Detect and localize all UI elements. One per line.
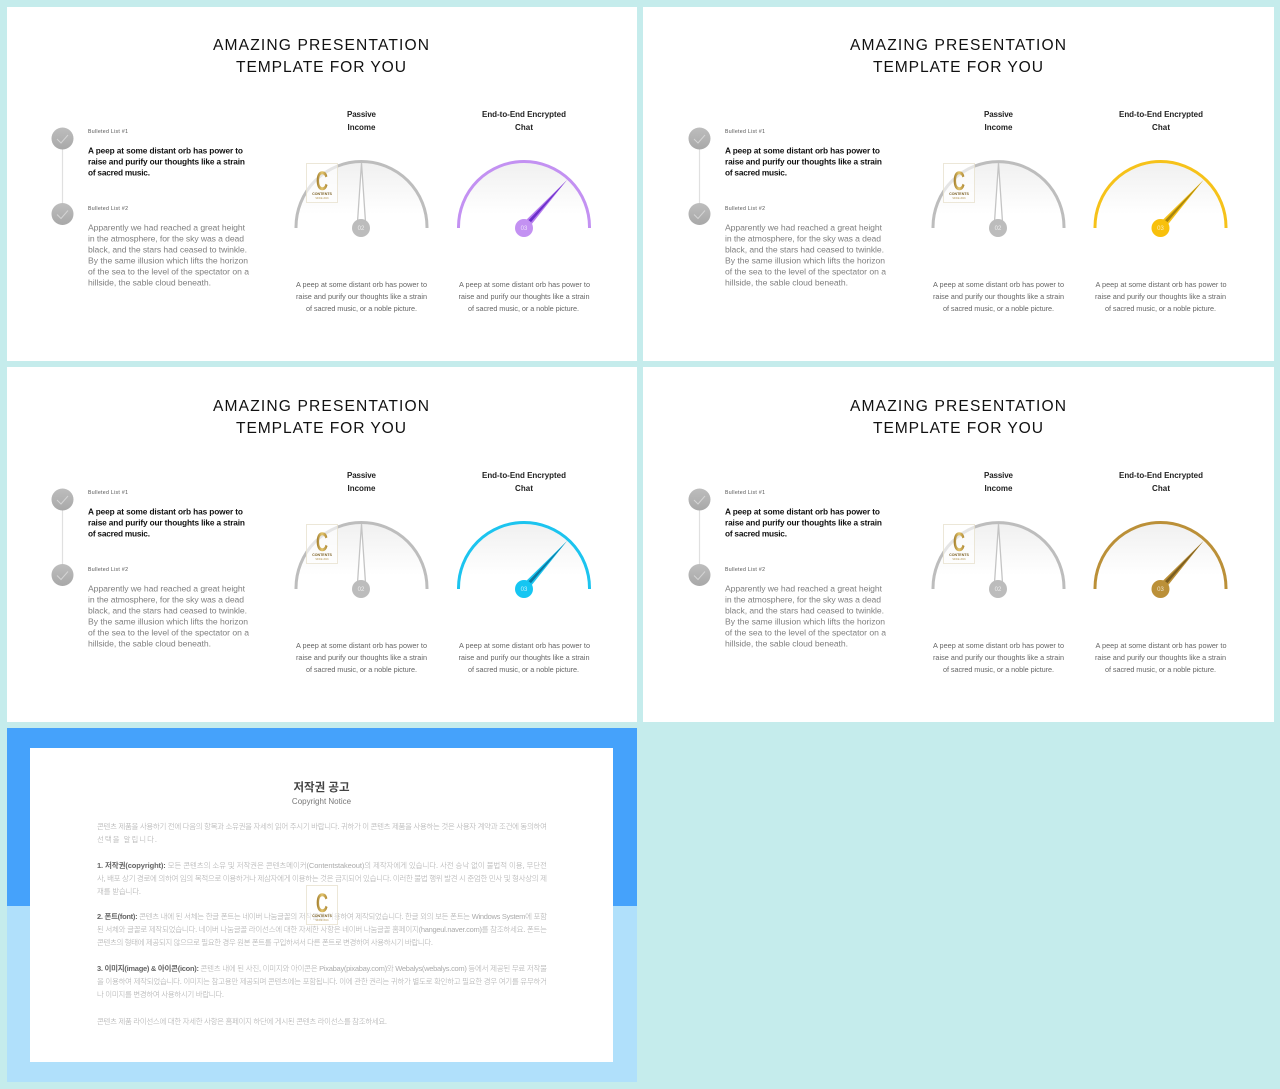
gauge: gold (1095, 522, 1226, 598)
section 3 images: 을 이용하여 제작되었습니다. 이미지는 참고용만 제공되며 콘텐츠에는 포함됩니다. 이에 관한 권리는 귀하가 별도로 확인하고 필요한 경우 여기를 유무하거 (97, 976, 547, 986)
watermark logo: CONTENTS (949, 192, 969, 196)
watermark logo: SINCE 2016 (952, 197, 966, 200)
heading: encrypted chat (482, 110, 566, 132)
bullet 2 text: By the same illusion which lifts the horizon (88, 256, 248, 266)
section 2 font: 콘텐츠의 형태에 제공되지 않으므로 필요한 경우 원본 폰트를 구입하셔서 다른 폰트로 변경하여 사용하시기 바랍니다. (97, 937, 433, 947)
bullet 2 text: Bulleted List #2 (725, 206, 765, 212)
heading: encrypted chat: Chat (1152, 123, 1170, 132)
caption left: raise and purify our thoughts like a strain (296, 653, 427, 662)
bullet 2 text: hillside, the sable cloud beneath. (725, 638, 848, 648)
title: TEMPLATE FOR YOU (236, 420, 406, 437)
watermark logo: CONTENTS (312, 553, 332, 557)
panel: copyright notice (7, 728, 637, 1082)
section 1 copyright: 재를 받습니다. (97, 887, 141, 896)
caption left: of sacred music, or a noble picture. (306, 665, 417, 674)
copyright heading: 저작권 공고 (293, 780, 350, 794)
section 1 copyright: 1. 저작권(copyright): 모든 콘텐츠의 소유 및 저작권은 콘텐츠메이커(Contentstakeout)의 제작자에게 있습니다. 사전 승낙 없이 불법적 이용, 무단전 (97, 860, 547, 870)
heading: passive income: Passive (984, 110, 1014, 119)
heading: encrypted chat: Chat (515, 123, 533, 132)
bullet 2 text: of the sea to the level of the spectator on a (88, 628, 249, 638)
caption left: A peep at some distant orb has power to (296, 641, 427, 650)
gauge: cyan (458, 522, 590, 598)
title: TEMPLATE FOR YOU (236, 59, 406, 76)
heading: encrypted chat: End-to-End Encrypted (482, 471, 566, 480)
bulleted list timeline (688, 128, 710, 225)
bullet 1 text (725, 490, 882, 538)
gauge: grey: 02 (995, 226, 1002, 232)
caption right: raise and purify our thoughts like a strain (458, 653, 590, 662)
bullet 2 text: in the atmosphere, for the sky was a dead (725, 234, 881, 244)
watermark logo: CONTENTS (949, 553, 969, 557)
title: AMAZING PRESENTATION (213, 398, 429, 415)
caption right (1095, 641, 1226, 674)
section 2 font (97, 911, 547, 947)
bullet 1 text: of sacred music. (88, 168, 150, 178)
section 1 copyright: 사, 배포 상기 경로에 의하여 임의 목적으로 이용하거나 제삼자에게 이용하는 것은 금지되어 있습니다. 이러한 불법 행위 발견 시 준엄한 민사 및 형사상의 제 (97, 873, 547, 883)
panel: slide 2 yellow gauge (643, 7, 1274, 361)
bullet 1 text: A peep at some distant orb has power to (88, 146, 243, 156)
caption right: of sacred music, or a noble picture. (1105, 304, 1216, 313)
caption right: A peep at some distant orb has power to (459, 641, 590, 650)
watermark logo (306, 524, 338, 564)
caption left: raise and purify our thoughts like a strain (933, 653, 1064, 662)
bullet 2 text: Apparently we had reached a great height (88, 222, 246, 232)
bullet 2 text: in the atmosphere, for the sky was a dead (88, 594, 244, 604)
bullet 1 text: of sacred music. (88, 528, 150, 538)
gauge: cyan: 03 (521, 587, 528, 593)
caption left: of sacred music, or a noble picture. (306, 304, 417, 313)
caption left: of sacred music, or a noble picture. (943, 665, 1054, 674)
caption right: A peep at some distant orb has power to (459, 280, 590, 289)
heading: passive income: Income (984, 484, 1013, 493)
watermark logo (306, 886, 338, 924)
bullet 2 text: in the atmosphere, for the sky was a dead (88, 234, 244, 244)
bullet 1 text: Bulleted List #1 (88, 490, 128, 496)
bullet 2 text: black, and the stars had ceased to twinkle. (88, 244, 247, 254)
heading: encrypted chat: Chat (1152, 484, 1170, 493)
gauge: grey: 02 (358, 587, 365, 593)
bullet 2 text: hillside, the sable cloud beneath. (725, 278, 848, 288)
heading: passive income: Income (348, 123, 376, 132)
bulleted list timeline (688, 488, 710, 586)
watermark logo: CONTENTS (312, 192, 332, 196)
bullet 2 text: of the sea to the level of the spectator on a (88, 266, 249, 276)
heading: passive income: Passive (347, 110, 377, 119)
heading: passive income: Income (348, 484, 376, 493)
watermark logo: C (953, 527, 965, 557)
gauge: yellow: 03 (1157, 226, 1164, 232)
watermark logo (306, 164, 338, 202)
heading: passive income (984, 110, 1014, 132)
panel: slide 3 cyan gauge (7, 367, 637, 722)
watermark logo: SINCE 2016 (315, 919, 329, 922)
bullet 2 text: Bulleted List #2 (88, 567, 128, 573)
heading: passive income: Income (984, 123, 1013, 132)
title (213, 37, 429, 76)
caption left: raise and purify our thoughts like a strain (933, 292, 1064, 301)
title: AMAZING PRESENTATION (213, 37, 429, 54)
gauge: grey (933, 162, 1064, 237)
caption right: of sacred music, or a noble picture. (468, 665, 579, 674)
bullet 2 text: By the same illusion which lifts the horizon (725, 616, 885, 626)
closing line: 콘텐츠 제품 라이선스에 대한 자세한 사항은 홈페이지 하단에 게시된 콘텐츠 라이선스를 참조하세요. (97, 1016, 387, 1026)
gauge: yellow (1095, 162, 1226, 237)
bullet 1 text: raise and purify our thoughts like a strain (88, 156, 245, 166)
caption left: of sacred music, or a noble picture. (943, 304, 1054, 313)
copyright heading: Copyright Notice (292, 797, 352, 806)
bullet 2 text: of the sea to the level of the spectator on a (725, 628, 886, 638)
caption right: A peep at some distant orb has power to (1096, 280, 1226, 289)
bullet 1 text: A peep at some distant orb has power to (725, 506, 880, 516)
bullet 2 text: Apparently we had reached a great height (725, 584, 883, 594)
bulleted list timeline (52, 488, 74, 586)
caption right (1095, 280, 1226, 313)
intro paragraph: 선택을 알립니다. (97, 835, 157, 844)
caption left (933, 280, 1064, 313)
bullet 1 text: Bulleted List #1 (725, 129, 765, 135)
bullet 2 text: of the sea to the level of the spectator on a (725, 266, 886, 276)
section 2 font: 된 서체와 글꼴로 제작되었습니다. 네이버 나눔글꼴 라이선스에 대한 자세한 사항은 네이버 나눔글꼴 홈페이지(hangeul.naver.com)를 참조하세요. 폰트는 (97, 924, 547, 934)
bullet 2 text: By the same illusion which lifts the horizon (88, 616, 248, 626)
section 3 images (97, 963, 547, 999)
heading: passive income (984, 471, 1014, 493)
bullet 2 text: black, and the stars had ceased to twinkle. (725, 244, 884, 254)
bullet 2 text (725, 567, 886, 648)
bullet 1 text (88, 490, 245, 538)
section 3 images: 3. 이미지(image) & 아이콘(icon): 콘텐츠 내에 된 사진, 이미지와 아이콘은 Pixabay(pixabay.com)와 Webalys(webalys.com) 등에서 제공된 무료 저작물 (97, 963, 547, 973)
section 2 font: 2. 폰트(font): 콘텐츠 내에 된 서체는 한글 폰트는 네이버 나눔글꼴의 저작물을 이용하여 제작되었습니다. 한글 외의 보든 폰트는 Windows System에 포함 (97, 911, 547, 921)
heading: encrypted chat: End-to-End Encrypted (482, 110, 566, 119)
heading: passive income: Passive (984, 471, 1014, 480)
title (213, 398, 429, 437)
watermark logo: CONTENTS (312, 914, 332, 918)
caption left (296, 280, 427, 313)
gauge: grey: 02 (995, 587, 1002, 593)
bullet 1 text: raise and purify our thoughts like a strain (88, 518, 245, 528)
watermark logo: SINCE 2016 (315, 558, 329, 561)
bulleted list timeline (52, 128, 74, 225)
caption right (458, 280, 590, 313)
bullet 2 text (88, 206, 249, 288)
panel: slide 4 gold gauge (643, 367, 1274, 722)
bullet 2 text (725, 206, 886, 288)
bullet 1 text: raise and purify our thoughts like a strain (725, 156, 882, 166)
bullet 1 text: Bulleted List #1 (88, 129, 128, 135)
bullet 1 text: A peep at some distant orb has power to (725, 146, 880, 156)
bullet 1 text (725, 129, 882, 178)
bullet 2 text: Bulleted List #2 (725, 567, 765, 573)
caption left (296, 641, 427, 674)
title: AMAZING PRESENTATION (850, 398, 1066, 415)
watermark logo (944, 524, 974, 564)
caption left: raise and purify our thoughts like a strain (296, 292, 427, 301)
gauge: grey (933, 523, 1064, 598)
bullet 2 text: Apparently we had reached a great height (88, 584, 246, 594)
caption right: A peep at some distant orb has power to (1096, 641, 1226, 650)
caption right: raise and purify our thoughts like a strain (1095, 653, 1226, 662)
section 3 images: 나 이미지를 변경하여 사용하시기 바랍니다. (97, 989, 224, 999)
bullet 2 text: By the same illusion which lifts the horizon (725, 256, 885, 266)
heading: encrypted chat (482, 471, 566, 493)
bullet 1 text: A peep at some distant orb has power to (88, 506, 243, 516)
heading: encrypted chat (1119, 471, 1203, 493)
gauge: grey (296, 162, 427, 237)
watermark logo: C (316, 888, 328, 918)
intro paragraph: 콘텐츠 제품을 사용하기 전에 다음의 항목과 소유권을 자세히 읽어 주시기 바랍니다. 귀하가 이 콘텐츠 제품을 사용하는 것은 사용자 계약과 조건에 동의하여 (97, 821, 547, 831)
panel: slide 1 purple gauge (7, 7, 637, 361)
bullet 2 text: hillside, the sable cloud beneath. (88, 638, 211, 648)
copyright heading (292, 780, 352, 806)
bullet 2 text: Bulleted List #2 (88, 206, 128, 212)
bullet 2 text: Apparently we had reached a great height (725, 222, 883, 232)
caption right: raise and purify our thoughts like a strain (458, 292, 590, 301)
title (850, 398, 1066, 437)
title: TEMPLATE FOR YOU (873, 59, 1043, 76)
caption left: A peep at some distant orb has power to (933, 641, 1064, 650)
heading: passive income: Passive (347, 471, 377, 480)
caption left (933, 641, 1064, 674)
title (850, 37, 1066, 76)
heading: encrypted chat: End-to-End Encrypted (1119, 110, 1203, 119)
caption right: of sacred music, or a noble picture. (468, 304, 579, 313)
watermark logo: C (953, 166, 965, 196)
heading: passive income (347, 110, 377, 132)
heading: encrypted chat: End-to-End Encrypted (1119, 471, 1203, 480)
gauge: purple (458, 162, 590, 237)
gauge: grey: 02 (358, 226, 365, 232)
bullet 2 text: hillside, the sable cloud beneath. (88, 278, 211, 288)
bullet 2 text: in the atmosphere, for the sky was a dead (725, 594, 881, 604)
bullet 2 text: black, and the stars had ceased to twinkle. (725, 606, 884, 616)
caption right: raise and purify our thoughts like a strain (1095, 292, 1226, 301)
bullet 1 text: raise and purify our thoughts like a strain (725, 518, 882, 528)
title: TEMPLATE FOR YOU (873, 420, 1043, 437)
gauge: grey (296, 522, 427, 598)
bullet 1 text: of sacred music. (725, 528, 787, 538)
heading: encrypted chat (1119, 110, 1203, 132)
caption left: A peep at some distant orb has power to (933, 280, 1064, 289)
bullet 1 text: of sacred music. (725, 168, 787, 178)
bullet 2 text: black, and the stars had ceased to twinkle. (88, 606, 247, 616)
watermark logo: C (316, 166, 328, 196)
watermark logo: SINCE 2016 (952, 558, 966, 561)
watermark logo: SINCE 2016 (315, 197, 329, 200)
bullet 1 text (88, 129, 245, 178)
gauge: purple: 03 (521, 226, 528, 232)
watermark logo (944, 164, 974, 202)
caption left: A peep at some distant orb has power to (296, 280, 427, 289)
intro paragraph (97, 821, 547, 844)
caption right (458, 641, 590, 674)
watermark logo: C (316, 527, 328, 557)
caption right: of sacred music, or a noble picture. (1105, 665, 1216, 674)
gauge: gold: 03 (1157, 587, 1164, 593)
heading: passive income (347, 471, 377, 493)
title: AMAZING PRESENTATION (850, 37, 1066, 54)
bullet 2 text (88, 567, 249, 648)
section 1 copyright (97, 860, 547, 896)
heading: encrypted chat: Chat (515, 484, 533, 493)
bullet 1 text: Bulleted List #1 (725, 490, 765, 496)
